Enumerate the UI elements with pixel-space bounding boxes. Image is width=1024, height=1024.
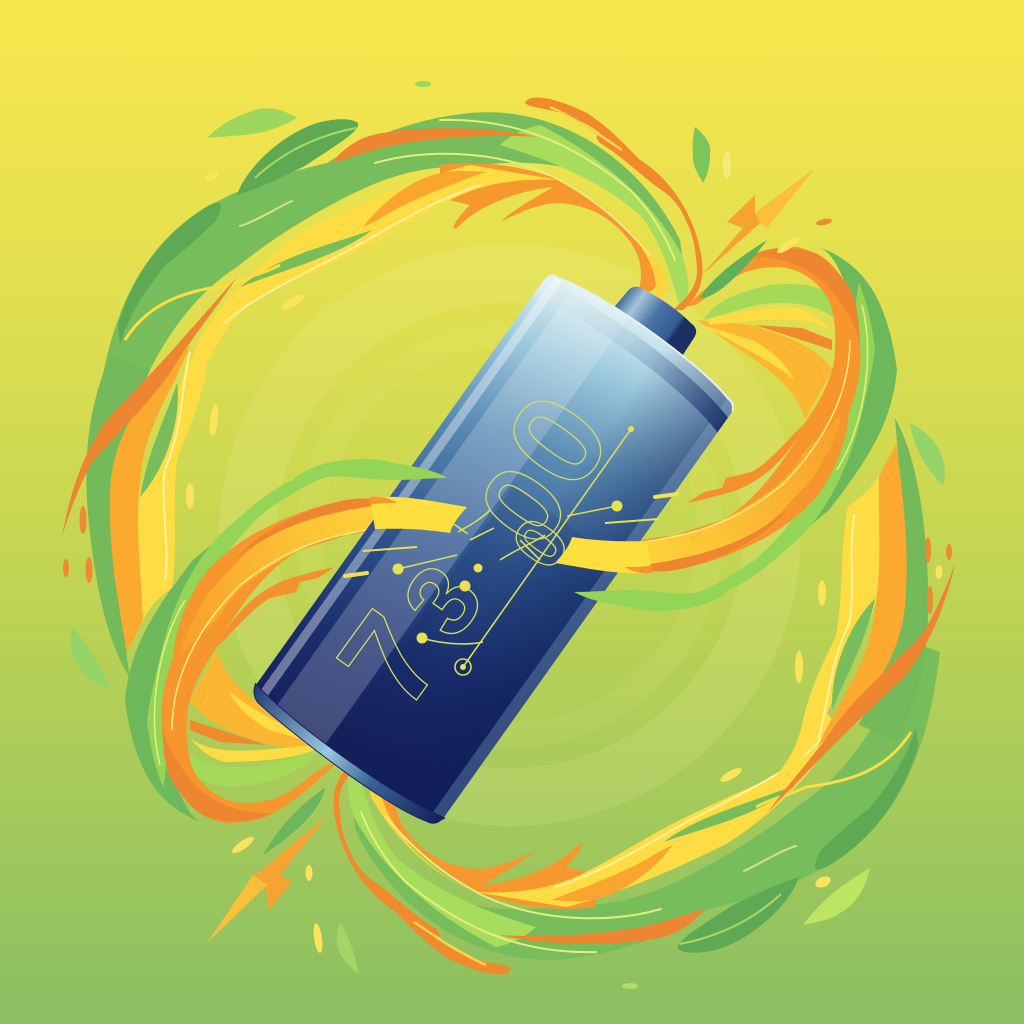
battery cap (613, 280, 702, 358)
green inner eye (140, 383, 178, 497)
outer swirl: right column (747, 411, 963, 822)
orange patch (363, 171, 485, 227)
upper flame thread (125, 265, 280, 340)
converging green band (188, 750, 318, 786)
arc orange top edge (235, 498, 397, 560)
leaf lower-left (71, 627, 110, 690)
lightning bolt: lower left (207, 815, 328, 943)
arc deep orange shade (162, 723, 273, 821)
light green ribbon (500, 125, 689, 308)
outer swirl: bottom band (333, 642, 940, 975)
front orange edge (370, 497, 397, 505)
leaves (71, 108, 945, 973)
background energy rings (248, 273, 772, 797)
converging orange streak (190, 720, 267, 745)
highlights (205, 120, 675, 345)
leaf bottom (337, 922, 358, 973)
green shards (263, 240, 767, 855)
arc orange band (162, 498, 397, 823)
dark green edge (118, 202, 221, 345)
dash (345, 573, 367, 576)
streak (363, 547, 417, 551)
battery capacity number: 0 (455, 443, 592, 567)
battery capacity number: 0 (477, 368, 638, 512)
inner arc: right (555, 247, 897, 611)
battery capacity number: 0 (497, 504, 585, 583)
lightning bolt: upper right (702, 168, 815, 275)
orange outer ribbon (525, 97, 703, 310)
leaf right (910, 423, 945, 485)
leaf top-left (207, 108, 297, 138)
converging yellow band (190, 738, 315, 762)
orange flame (62, 277, 237, 537)
battery top rim (547, 265, 743, 411)
arc bright green band (147, 459, 448, 787)
dark green leaf (237, 119, 358, 195)
leaf vein (255, 128, 356, 178)
converging yellow highlight (228, 690, 320, 745)
orange column (110, 345, 190, 653)
orange streak (332, 128, 537, 163)
green strip (86, 355, 150, 678)
arc yellow band (180, 497, 467, 657)
arc dark green band (125, 525, 235, 822)
battery (253, 274, 734, 824)
yellow upper flame (197, 165, 560, 360)
battery capacity number: 7 (310, 587, 471, 731)
battery capacity number: 3 (381, 545, 504, 656)
battery body (247, 260, 746, 830)
arc orange flame (217, 567, 335, 647)
confetti (63, 81, 952, 989)
front ribbon: left tip (345, 463, 467, 576)
leaf bottom-right (803, 868, 870, 925)
outer swirl: left column (62, 277, 257, 678)
column highlight (164, 352, 190, 580)
green ribbon (96, 112, 688, 430)
leaf top (693, 127, 710, 183)
yellow column (138, 287, 257, 620)
front green tip (393, 463, 448, 480)
outer swirl: top band (96, 97, 703, 430)
front ribbon: right tip (555, 494, 677, 607)
inner arc: left (125, 459, 467, 823)
circuit lines and nodes (392, 426, 634, 675)
front yellow tip (370, 497, 467, 533)
arc highlights (154, 527, 385, 765)
battery capacity number (310, 368, 638, 731)
green eye in flame (240, 230, 372, 287)
converging yellow-orange band (190, 650, 325, 750)
orange flame end (440, 163, 657, 293)
yellow inner streak (560, 180, 666, 300)
ribbon highlight (550, 107, 622, 150)
battery bottom rim (244, 684, 445, 835)
